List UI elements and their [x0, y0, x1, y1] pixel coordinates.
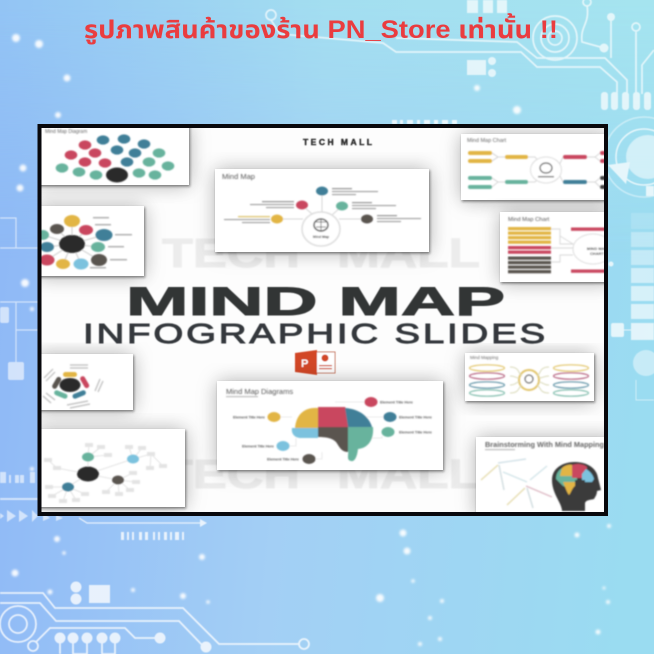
slide: mind map chart stacked bars	[500, 212, 612, 282]
stacked bars content: CHART	[590, 251, 605, 256]
decorative circuit: left side	[0, 218, 63, 522]
slide: mind mapping rings	[465, 353, 594, 401]
icon: head silhouette	[552, 462, 601, 511]
slide: mind map diagrams brain	[217, 381, 443, 470]
watermark: upper MALL: MALL	[337, 230, 480, 276]
chart content top right	[467, 138, 608, 189]
stacked bars content: MIND MAP	[587, 246, 607, 251]
brainstorming content	[481, 440, 604, 511]
brain diagram content: Element Title Here	[242, 444, 275, 448]
mind mapping rings content: Mind Mapping	[470, 355, 499, 360]
hub and spoke content	[37, 215, 132, 270]
mind mapping rings content	[470, 355, 588, 396]
mind map center content: Mind Map	[222, 172, 255, 181]
slide: mind map chart top right	[461, 134, 611, 200]
brain diagram content: Element Title Here	[380, 400, 414, 404]
decorative circuit: top right	[266, 0, 654, 110]
black frame	[40, 126, 606, 514]
slide: node network	[36, 429, 185, 507]
bubbles of first slide: Mind Map Diagram	[45, 129, 87, 135]
slide: mind map diagram bubbles	[36, 124, 189, 185]
brain diagram content: Element Title Here	[399, 430, 433, 434]
brain diagram content: Mind Map Diagrams	[226, 387, 293, 396]
stacked bars content: Mind Map Chart	[508, 217, 550, 223]
brain diagram content: Element Title Here	[267, 456, 300, 462]
stacked bars content	[508, 217, 613, 273]
decorative circuit: right side	[604, 117, 654, 400]
brain diagram content: Element Title Here	[399, 414, 433, 420]
watermark: upper TECH: TECH	[162, 230, 300, 276]
mind map center content: Mind Map	[313, 235, 329, 239]
main title: MIND MAP	[126, 280, 505, 324]
node network content	[44, 443, 167, 503]
icon: powerpoint logo	[295, 350, 335, 375]
brain diagram content: Element Title Here	[233, 414, 266, 420]
radial pills content	[43, 365, 103, 408]
brainstorming content: Brainstorming With Mind Mapping	[485, 440, 604, 449]
subtitle: INFOGRAPHIC SLIDES	[83, 318, 548, 349]
icon: powerpoint logo: P	[301, 358, 308, 370]
slide: mind map center	[215, 169, 429, 252]
watermark: lower MALL: MALL	[337, 451, 480, 497]
slide: hub and spoke	[36, 206, 144, 276]
framed product image	[36, 124, 616, 517]
bubbles of first slide	[45, 129, 174, 182]
mind map center content	[222, 172, 421, 246]
decorative circuit: bottom left	[0, 120, 457, 654]
chart content top right: Mind Map Chart	[467, 138, 507, 144]
brand name: TECH MALL	[303, 137, 372, 147]
watermark: lower TECH: TECH	[162, 451, 300, 497]
brain illustration	[292, 407, 373, 461]
slide: brainstorming	[476, 437, 616, 517]
heading: store notice: รูปภาพสินค้าของร้าน PN_Store เท่านั้น !!	[84, 13, 558, 45]
brain diagram content	[226, 387, 433, 464]
slide: radial pills	[36, 354, 133, 410]
